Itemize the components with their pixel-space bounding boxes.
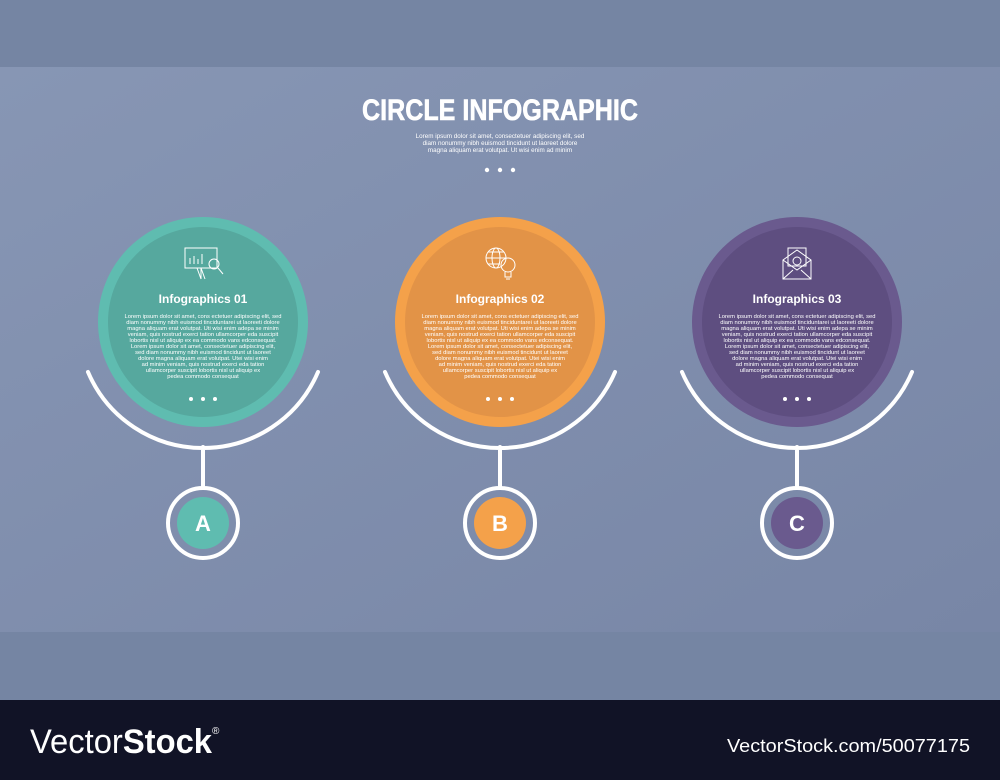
subtitle text xyxy=(416,133,585,154)
panel: infographics 03: Lorem ipsum dolor sit amet, cons ectetuer adipiscing elit, sed xyxy=(719,314,875,320)
footer: VectorStock.com/50077175 xyxy=(727,736,970,756)
panel: infographics 02: veniam, quis nostrud exerci tation ullamcorper eda suscipit xyxy=(425,332,576,338)
panel: infographics 03: sed diam nonummy nibh euismod tincidunt ut laoreet xyxy=(729,350,865,356)
panel: infographics 01: sed diam nonummy nibh euismod tincidunt ut laoreet xyxy=(135,350,271,356)
panel: infographics 02: pedea commodo consequat xyxy=(464,374,536,380)
panel: infographics 03: magna aliquam erat volutpat. Uti wisi enim adepa se minim xyxy=(721,326,873,332)
panel: infographics 03: Infographics 03 xyxy=(753,292,842,306)
panel: infographics 03: ullamcorper suscipit lobortis nisl ut aliquip ex xyxy=(740,368,854,374)
panel: infographics 01: Lorem ipsum dolor sit amet, consectetuer adipiscing elit, xyxy=(131,344,276,350)
panel: infographics 02: ad minim veniam, quis nostrud exerci eda tation xyxy=(439,362,561,368)
panel: infographics 01: ad minim veniam, quis nostrud exerci eda tation xyxy=(142,362,264,368)
panel: infographics 01: pedea commodo consequat xyxy=(167,374,239,380)
badge A: A xyxy=(195,511,211,536)
badge B xyxy=(465,488,535,558)
panel: infographics 02: Lorem ipsum dolor sit amet, consectetuer adipiscing elit, xyxy=(428,344,573,350)
icon: globe bulb xyxy=(486,248,515,279)
connector arc A xyxy=(88,372,318,488)
panel: infographics 01: veniam, quis nostrud exerci tation ullamcorper eda suscipit xyxy=(128,332,279,338)
title: CIRCLE INFOGRAPHIC xyxy=(362,94,638,127)
panel: infographics 01: lobortis nisl ut aliquip ex ea commodo vans edconsequat. xyxy=(130,338,277,344)
panel: infographics 03: ad minim veniam, quis nostrud exerci eda tation xyxy=(736,362,858,368)
panel: infographics 01: Infographics 01 xyxy=(159,292,248,306)
panel: infographics 03: Lorem ipsum dolor sit amet, consectetuer adipiscing elit, xyxy=(725,344,870,350)
panel: infographics 03: lobortis nisl ut aliquip ex ea commodo vans edconsequat. xyxy=(724,338,871,344)
icon: envelope gear xyxy=(783,248,811,279)
panel: infographics 02: ullamcorper suscipit lobortis nisl ut aliquip ex xyxy=(443,368,557,374)
panel: infographics 02: Lorem ipsum dolor sit amet, cons ectetuer adipiscing elit, sed xyxy=(422,314,578,320)
panel: infographics 02: diam nonummy nibh euismod tinciduntarei ut laoreeti dolore xyxy=(423,320,577,326)
panel: infographics 01: ullamcorper suscipit lobortis nisl ut aliquip ex xyxy=(146,368,260,374)
panel: infographics 02: sed diam nonummy nibh euismod tincidunt ut laoreet xyxy=(432,350,568,356)
badge A xyxy=(168,488,238,558)
panel: infographics 03: diam nonummy nibh euismod tinciduntarei ut laoreeti dolore xyxy=(720,320,874,326)
panel: infographics 01 xyxy=(98,217,308,427)
connector arc C xyxy=(682,372,912,488)
panel: infographics 03 xyxy=(692,217,902,427)
panel: infographics 02: lobortis nisl ut aliquip ex ea commodo vans edconsequat. xyxy=(427,338,574,344)
panel: infographics 01: Lorem ipsum dolor sit amet, cons ectetuer adipiscing elit, sed xyxy=(125,314,281,320)
footer: ® xyxy=(212,726,220,737)
panel: infographics 03: pedea commodo consequat xyxy=(761,374,833,380)
icon: presentation board xyxy=(185,248,223,279)
panel: infographics 01: diam nonummy nibh euismod tinciduntarei ut laoreeti dolore xyxy=(126,320,280,326)
subtitle text: Lorem ipsum dolor sit amet, consectetuer adipiscing elit, sed xyxy=(416,133,585,140)
subtitle text: magna aliquam erat volutpat. Ut wisi enim ad minim xyxy=(428,147,572,154)
connector arc B xyxy=(385,372,615,488)
badge C xyxy=(762,488,832,558)
badge C: C xyxy=(789,511,805,536)
badge B: B xyxy=(492,511,508,536)
footer xyxy=(0,700,1000,780)
panel: infographics 02 xyxy=(395,217,605,427)
panel: infographics 01: dolore magna aliquam erat volutpat. Utei wisi enim xyxy=(138,356,268,362)
panel: infographics 03: veniam, quis nostrud exerci tation ullamcorper eda suscipit xyxy=(722,332,873,338)
dots xyxy=(485,168,515,172)
panel: infographics 02: Infographics 02 xyxy=(456,292,545,306)
panel: infographics 03: dolore magna aliquam erat volutpat. Utei wisi enim xyxy=(732,356,862,362)
panel: infographics 01: magna aliquam erat volutpat. Uti wisi enim adepa se minim xyxy=(127,326,279,332)
panel: infographics 02: magna aliquam erat volutpat. Uti wisi enim adepa se minim xyxy=(424,326,576,332)
panel: infographics 02: dolore magna aliquam erat volutpat. Utei wisi enim xyxy=(435,356,565,362)
footer: VectorStock xyxy=(30,723,212,761)
subtitle text: diam nonummy nibh euismod tincidunt ut laoreet dolore xyxy=(423,140,578,147)
